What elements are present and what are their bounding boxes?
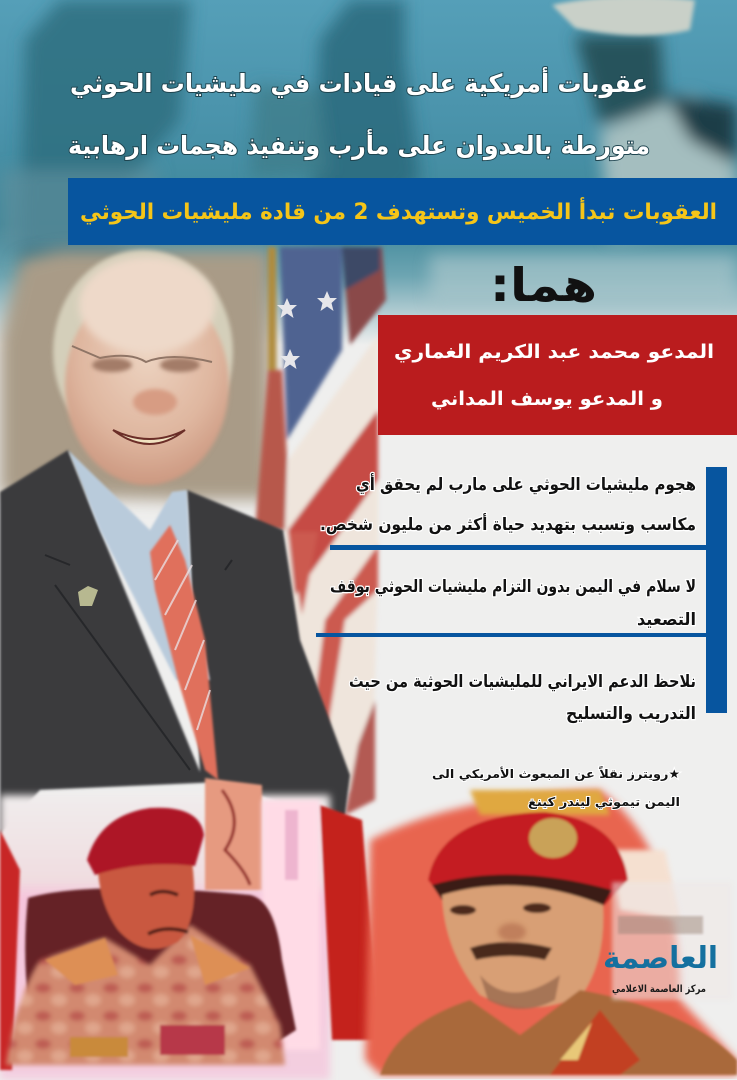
beret <box>87 808 204 875</box>
banner: sanctions start Thursday: العقوبات تبدأ الخميس وتستهدف 2 من قادة مليشيات الحوثي <box>80 196 717 225</box>
photo: right commander <box>365 790 737 1075</box>
title: متورطة بالعدوان على مأرب وتنفيذ هجمات ارهابية <box>68 129 650 161</box>
source note: اليمن تيموثي ليندر كينغ <box>528 795 680 810</box>
wall behind envoy <box>0 250 270 500</box>
title: عقوبات أمريكية على قيادات في مليشيات الحوثي <box>70 67 648 99</box>
banner: sanctions start Thursday <box>68 178 737 245</box>
shirt collar <box>68 450 210 680</box>
medals <box>160 1025 225 1055</box>
cap <box>428 812 628 905</box>
face <box>442 886 603 1008</box>
flag stars <box>277 291 337 369</box>
statement 1 <box>320 473 696 535</box>
source note <box>432 766 680 810</box>
logo: Al-Asimah media centre <box>603 882 732 1000</box>
logo caption: مركز العاصمة الاعلامي <box>612 984 706 995</box>
nose <box>133 389 177 415</box>
panel: names: و المدعو يوسف المداني <box>431 388 663 410</box>
panel: names <box>378 315 737 435</box>
statement 1: مكاسب وتسبب بتهديد حياة أكثر من مليون شخص. <box>320 513 696 535</box>
statement 1: هجوم مليشيات الحوثي على مارب لم يحقق أي <box>356 473 696 495</box>
chair <box>25 888 296 1050</box>
photo: left commander with beret <box>0 778 380 1080</box>
statement 2: التصعيد <box>637 610 696 630</box>
statement 3: التدريب والتسليح <box>566 704 696 724</box>
title <box>68 67 650 161</box>
lapel shadow <box>45 555 232 770</box>
source note: ★رويترز نقلاً عن المبعوث الأمريكي الى <box>432 766 680 782</box>
flag <box>255 247 386 815</box>
heading: they are: هما: <box>490 258 597 312</box>
smile <box>113 430 185 444</box>
name tag <box>70 1037 128 1057</box>
logo name: العاصمة <box>603 941 718 976</box>
panel: key statements <box>316 467 727 724</box>
glasses and eyes <box>72 346 212 362</box>
curtains <box>0 778 380 1070</box>
lapel pin <box>78 586 98 606</box>
statement 2 <box>330 577 696 630</box>
red background <box>365 790 737 1075</box>
suit <box>0 450 350 835</box>
head <box>53 250 233 454</box>
uniform <box>6 925 285 1065</box>
photo: American envoy with flag <box>0 247 386 835</box>
tie <box>150 525 218 780</box>
panel: names: المدعو محمد عبد الكريم الغماري <box>394 341 714 364</box>
statement 3 <box>349 672 696 724</box>
vertical bar <box>706 467 727 713</box>
uniform <box>380 990 737 1075</box>
face <box>98 862 194 949</box>
